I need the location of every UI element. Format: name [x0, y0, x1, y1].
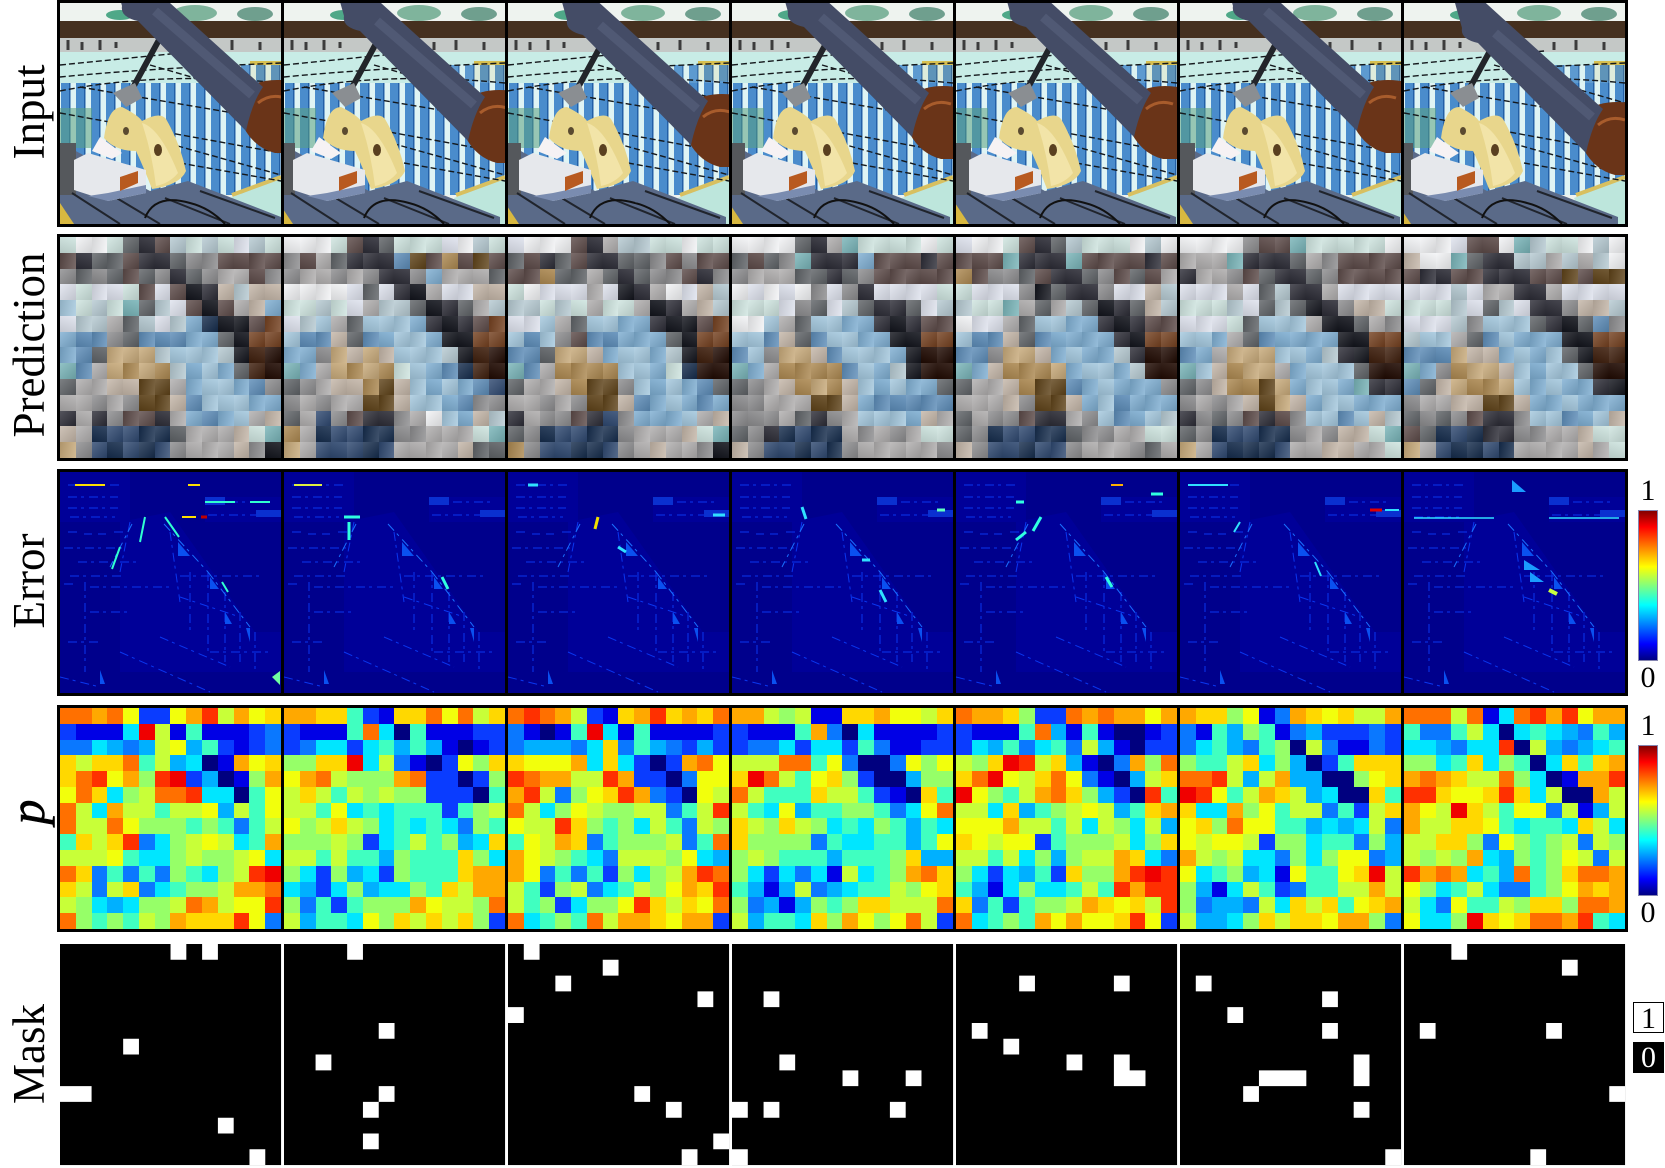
colour bar legend: p: 0	[1640, 896, 1656, 929]
p heatmap frame 3	[508, 708, 729, 929]
p heatmap frame 2	[284, 708, 505, 929]
colour bar legend: error: 0	[1640, 661, 1656, 694]
prediction frame 4	[732, 237, 953, 458]
mask frame 1	[60, 944, 281, 1165]
p heatmap frame 6	[1180, 708, 1401, 929]
error frame 5	[956, 472, 1177, 693]
error frame 4	[732, 472, 953, 693]
mask frame 2	[284, 944, 505, 1165]
mask frame 4	[732, 944, 953, 1165]
error frame 2	[284, 472, 505, 693]
p heatmap frame 1	[60, 708, 281, 929]
prediction frame 6	[1180, 237, 1401, 458]
prediction frame 5	[956, 237, 1177, 458]
colour bar legend: error	[1638, 474, 1658, 694]
input frame 3	[508, 3, 729, 224]
row: prediction frames	[57, 234, 1628, 461]
error frame 6	[1180, 472, 1401, 693]
mask frame 5	[956, 944, 1177, 1165]
row: p probability heatmaps	[57, 705, 1628, 932]
input frame 6	[1180, 3, 1401, 224]
input frame 4	[732, 3, 953, 224]
binary legend: mask: 0	[1641, 1041, 1656, 1074]
error frame 3	[508, 472, 729, 693]
p heatmap frame 7	[1404, 708, 1625, 929]
input frame 7	[1404, 3, 1625, 224]
colour bar legend: p	[1638, 709, 1658, 929]
input frame 1	[60, 3, 281, 224]
binary legend: mask	[1633, 1002, 1664, 1074]
mask frame 3	[508, 944, 729, 1165]
prediction frame 3	[508, 237, 729, 458]
input frame 5	[956, 3, 1177, 224]
binary legend: mask: 1	[1641, 1002, 1656, 1035]
row label: Error: Error	[4, 534, 54, 628]
colour bar legend: p: 1	[1640, 709, 1656, 742]
row: input frames	[57, 0, 1628, 227]
colour bar legend: error: 1	[1640, 474, 1656, 507]
row label: Input: Input	[4, 64, 54, 160]
row label: p: p	[0, 800, 55, 828]
prediction frame 7	[1404, 237, 1625, 458]
row label: Mask: Mask	[4, 1004, 54, 1104]
prediction frame 2	[284, 237, 505, 458]
input frame 2	[284, 3, 505, 224]
error frame 7	[1404, 472, 1625, 693]
mask frame 7	[1404, 944, 1625, 1165]
row: error frames	[57, 469, 1628, 696]
prediction frame 1	[60, 237, 281, 458]
mask frame 6	[1180, 944, 1401, 1165]
error frame 1	[60, 472, 281, 693]
row label: Prediction: Prediction	[4, 253, 54, 437]
p heatmap frame 4	[732, 708, 953, 929]
p heatmap frame 5	[956, 708, 1177, 929]
